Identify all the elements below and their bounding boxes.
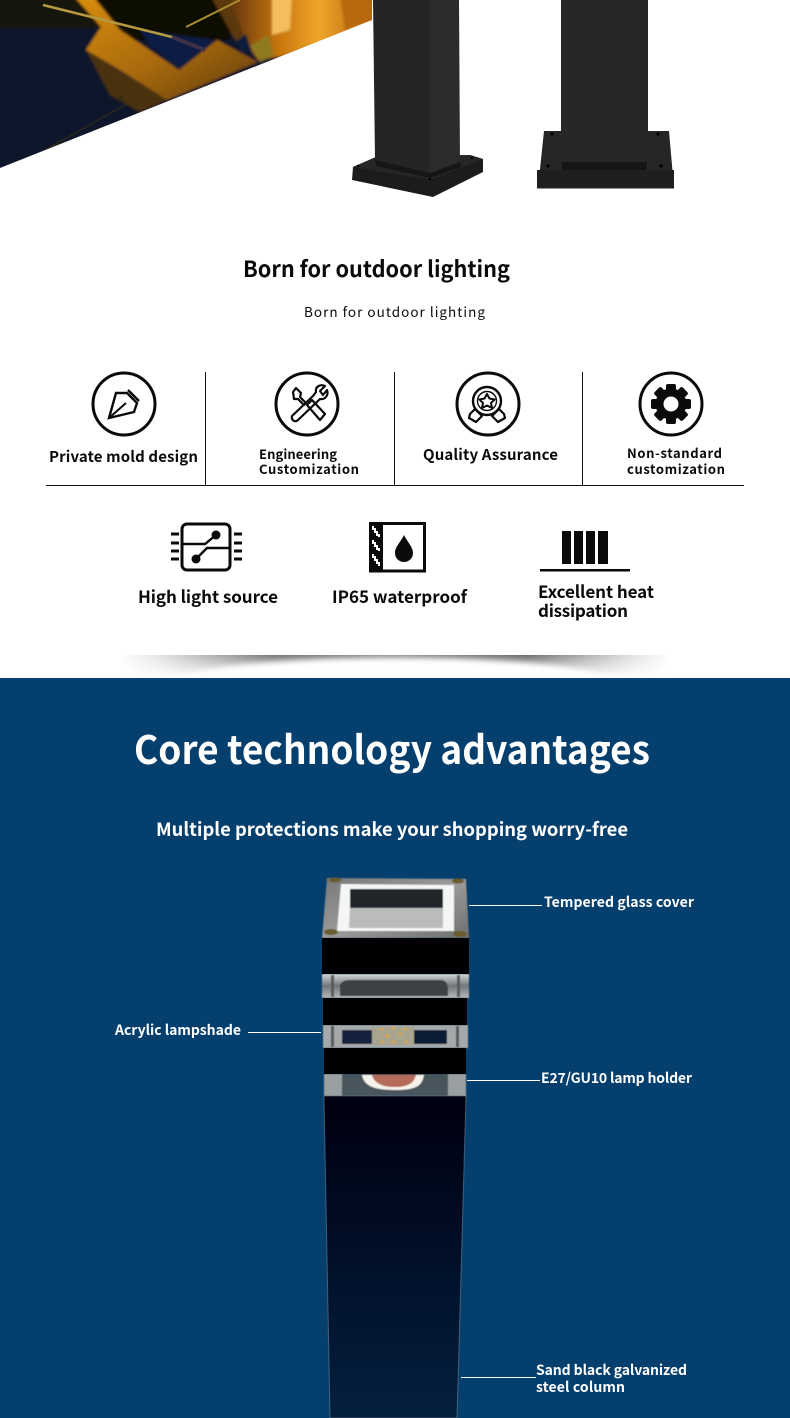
- black steel column: [324, 1096, 466, 1418]
- label: excellent heat dissipation: dissipation: [538, 597, 628, 622]
- black bands: [322, 938, 469, 1074]
- label: private mold design: Private mold design: [49, 446, 198, 467]
- callout: tempered glass cover: Tempered glass cover: [544, 892, 695, 912]
- label: engineering customization: [259, 444, 359, 478]
- label: engineering customization: Engineering: [259, 444, 337, 463]
- label: excellent heat dissipation: [538, 578, 654, 622]
- icon: pen nib in circle: [93, 373, 155, 435]
- product photo: angled post with base: [352, 0, 483, 197]
- section subtitle: Multiple protections make your shopping worry-free: [156, 816, 628, 842]
- label: non-standard customization: customization: [627, 459, 725, 478]
- label: excellent heat dissipation: Excellent heat: [538, 578, 654, 603]
- subheading: Born for outdoor lighting: [304, 301, 485, 321]
- callout: steel column: [461, 1360, 687, 1397]
- icon: heat dissipation fins: [540, 531, 630, 572]
- callout: lamp holder: E27/GU10 lamp holder: [541, 1068, 693, 1088]
- heading: Born for outdoor lighting: [243, 252, 511, 284]
- label: IP65 waterproof: IP65 waterproof: [332, 583, 468, 608]
- icon: light source chip: [171, 524, 242, 570]
- icon: gear in circle: [640, 373, 702, 435]
- icon: waterproof drop: [369, 522, 426, 572]
- section title: Core technology advantages: [134, 720, 650, 776]
- section shadow: [120, 655, 670, 706]
- label: non-standard customization: [627, 443, 725, 478]
- lamp post product image: [322, 878, 469, 1418]
- product photo: front post with base: [537, 0, 674, 188]
- callout: steel column: Sand black galvanized: [536, 1360, 687, 1380]
- callout: steel column: steel column: [536, 1377, 625, 1397]
- icon: crossed wrench and screwdriver in circle: [276, 373, 338, 435]
- feature grid dividers: [46, 372, 744, 486]
- lamp cap with glass cover: [322, 878, 469, 938]
- label: quality assurance: Quality Assurance: [423, 444, 558, 465]
- acrylic lampshade bands: [322, 974, 469, 1096]
- icon: quality medal in circle: [457, 373, 519, 435]
- callout: acrylic lampshade: Acrylic lampshade: [114, 1020, 241, 1040]
- label: high light source: High light source: [138, 583, 278, 608]
- header photo: lit wooden boat at night: [0, 0, 380, 175]
- label: non-standard customization: Non-standard: [627, 443, 722, 462]
- label: engineering customization: Customization: [259, 459, 359, 478]
- panel: core technology: [0, 678, 790, 1418]
